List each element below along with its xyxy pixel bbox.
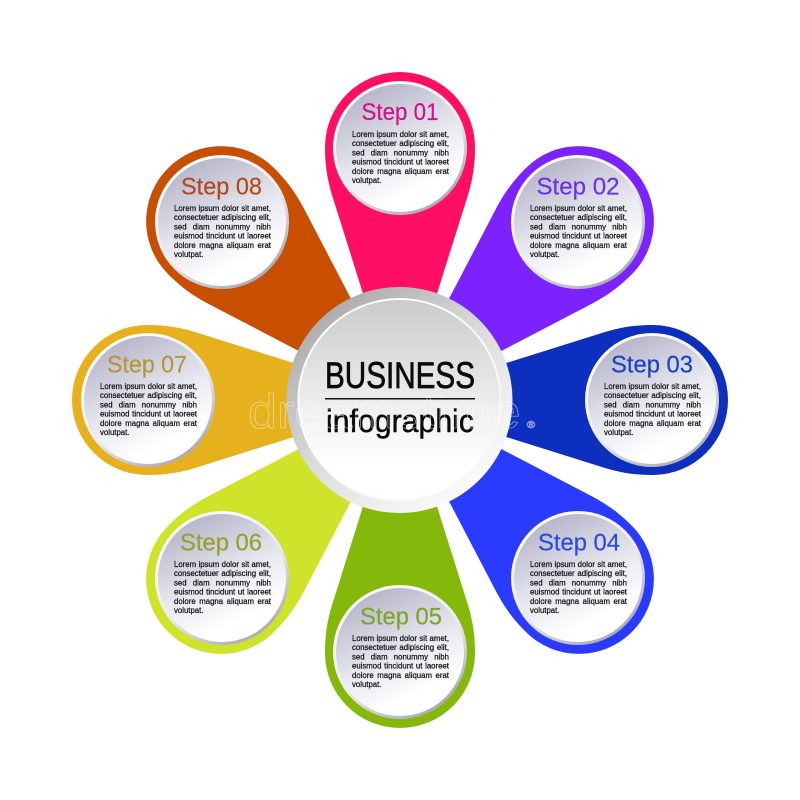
heading: step 02: Step 02 xyxy=(536,174,620,200)
disc: step 04 xyxy=(511,511,645,645)
text block: step 01: volutpat. xyxy=(352,176,381,185)
text block: step 08: Lorem ipsum dolor sit amet, xyxy=(174,204,271,213)
text block: step 08: consectetuer adipiscing elit, xyxy=(174,213,271,222)
petal: step 06 xyxy=(115,411,389,685)
text block: step 04: consectetuer adipiscing elit, xyxy=(530,569,627,578)
text block: step 08: sed diam nonummy nibh xyxy=(174,222,271,231)
text block: step 02: sed diam nonummy nibh xyxy=(530,222,627,231)
heading: step 07: Step 07 xyxy=(107,352,187,378)
petal: step 03 xyxy=(490,325,728,475)
heading: step 05: Step 05 xyxy=(360,604,442,630)
text block: step 07: Lorem ipsum dolor sit amet, xyxy=(100,382,197,391)
text block: step 08: volutpat. xyxy=(174,250,203,259)
text block: step 01: sed diam nonummy nibh xyxy=(352,148,449,157)
text block: step 06: euismod tincidunt ut laoreet xyxy=(174,588,272,597)
text block: step 03: euismod tincidunt ut laoreet xyxy=(604,410,702,419)
divider line xyxy=(325,398,475,400)
petal: step 05 xyxy=(325,490,475,728)
title: business: BUSINESS xyxy=(325,355,475,396)
heading: step 08: Step 08 xyxy=(181,174,262,200)
text block: step 03: sed diam nonummy nibh xyxy=(604,400,701,409)
text block: step 05: euismod tincidunt ut laoreet xyxy=(352,662,450,671)
text block: step 01: euismod tincidunt ut laoreet xyxy=(352,158,450,167)
text block: step 03: consectetuer adipiscing elit, xyxy=(604,391,701,400)
subtitle: infographic: infographic xyxy=(326,403,474,439)
panel: step 04 xyxy=(411,411,685,685)
text block: step 07: sed diam nonummy nibh xyxy=(100,400,197,409)
text block: step 05: dolore magna aliquam erat xyxy=(352,671,450,680)
text block: step 03: Lorem ipsum dolor sit amet, xyxy=(604,382,701,391)
panel: step 07 xyxy=(72,325,310,475)
panel: central hub xyxy=(286,287,512,513)
text block: step 04: euismod tincidunt ut laoreet xyxy=(530,588,628,597)
text block: step 02: dolore magna aliquam erat xyxy=(530,241,628,250)
text block: step 05: sed diam nonummy nibh xyxy=(352,652,449,661)
text block: step 04: sed diam nonummy nibh xyxy=(530,578,627,587)
panel: step 02 xyxy=(411,115,685,389)
text block: step 08: euismod tincidunt ut laoreet xyxy=(174,232,272,241)
text block: step 06: Lorem ipsum dolor sit amet, xyxy=(174,560,271,569)
text block: step 02: euismod tincidunt ut laoreet xyxy=(530,232,628,241)
text block: step 04: volutpat. xyxy=(530,606,559,615)
petal: step 08 xyxy=(115,115,389,389)
text block: step 01: dolore magna aliquam erat xyxy=(352,167,450,176)
heading: step 04: Step 04 xyxy=(538,530,620,556)
disc: step 03 xyxy=(585,333,719,467)
disc: step 05 xyxy=(333,585,467,719)
panel: step 06 xyxy=(115,411,389,685)
text block: step 02: consectetuer adipiscing elit, xyxy=(530,213,627,222)
disc: step 07 xyxy=(81,333,215,467)
text block: step 02: volutpat. xyxy=(530,250,559,259)
disc: step 02 xyxy=(511,155,645,289)
disc: step 08 xyxy=(155,155,289,289)
petal: step 04 xyxy=(411,411,685,685)
panel: step 03 xyxy=(490,325,728,475)
disc: step 06 xyxy=(155,511,289,645)
text block: step 04: dolore magna aliquam erat xyxy=(530,597,628,606)
text block: step 06: volutpat. xyxy=(174,606,203,615)
petal: step 07 xyxy=(72,325,310,475)
text block: step 06: sed diam nonummy nibh xyxy=(174,578,271,587)
text block: step 06: consectetuer adipiscing elit, xyxy=(174,569,271,578)
hub face xyxy=(300,300,500,500)
text block: step 07: volutpat. xyxy=(100,428,129,437)
disc: step 01 xyxy=(333,81,467,215)
panel: step 08 xyxy=(115,115,389,389)
text block: step 08: dolore magna aliquam erat xyxy=(174,241,272,250)
text block: step 03: volutpat. xyxy=(604,428,633,437)
watermark: dreamstime ® xyxy=(248,386,536,439)
text block: step 01: consectetuer adipiscing elit, xyxy=(352,139,449,148)
text block: step 07: euismod tincidunt ut laoreet xyxy=(100,410,198,419)
heading: step 01: Step 01 xyxy=(362,99,438,126)
text block: step 07: dolore magna aliquam erat xyxy=(100,419,198,428)
heading: step 06: Step 06 xyxy=(180,530,262,556)
text block: step 01: Lorem ipsum dolor sit amet, xyxy=(352,130,449,139)
text block: step 02: Lorem ipsum dolor sit amet, xyxy=(530,204,627,213)
text block: step 05: consectetuer adipiscing elit, xyxy=(352,643,449,652)
text block: step 07: consectetuer adipiscing elit, xyxy=(100,391,197,400)
hub rim highlight xyxy=(298,298,502,502)
text block: step 04: Lorem ipsum dolor sit amet, xyxy=(530,560,627,569)
panel: step 01 xyxy=(325,72,475,310)
heading: step 03: Step 03 xyxy=(611,352,693,378)
panel: step 05 xyxy=(325,490,475,728)
petal: step 02 xyxy=(411,115,685,389)
text block: step 05: Lorem ipsum dolor sit amet, xyxy=(352,634,449,643)
text block: step 05: volutpat. xyxy=(352,680,381,689)
text block: step 06: dolore magna aliquam erat xyxy=(174,597,272,606)
text block: step 03: dolore magna aliquam erat xyxy=(604,419,702,428)
hub outer ring xyxy=(286,287,512,513)
petal: step 01 xyxy=(325,72,475,310)
